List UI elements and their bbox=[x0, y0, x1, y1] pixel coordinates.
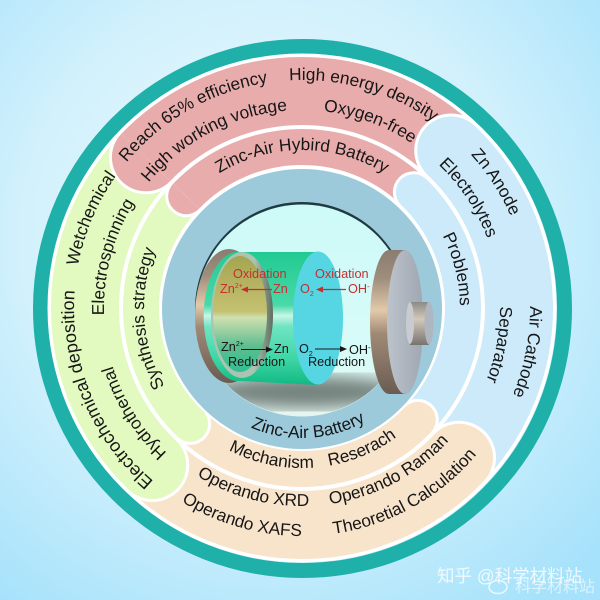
curved labels: mechanism research: Reserach bbox=[328, 430, 396, 466]
reduction labels: Zn bbox=[274, 342, 289, 356]
oxidation labels: 2+ bbox=[235, 283, 243, 290]
right metal cap side bbox=[370, 250, 406, 394]
core circle bbox=[196, 204, 408, 416]
reduction labels: Reduction bbox=[308, 355, 365, 369]
oxidation labels: O bbox=[300, 282, 310, 296]
curved labels: hybrid battery advantages bbox=[118, 68, 438, 182]
left metal casing bbox=[195, 249, 263, 383]
battery illustration bbox=[195, 249, 434, 408]
curved labels: synthesis strategy: Wetchemical bbox=[66, 170, 116, 264]
curved labels: mechanism research: Theoretial Calculation bbox=[332, 450, 476, 534]
reduction labels: Reduction bbox=[228, 355, 285, 369]
oxidation labels: - bbox=[367, 282, 370, 291]
curved labels: hybrid battery advantages: Reach 65% efficiency bbox=[118, 74, 266, 162]
reduction labels: O bbox=[299, 342, 309, 356]
reduction labels: 2 bbox=[309, 351, 313, 358]
watermark: 知乎 @科学材料站 bbox=[437, 566, 582, 586]
panel: problems inner band bbox=[74, 80, 530, 536]
panel: mechanism inner band bbox=[74, 80, 530, 536]
curved labels: hybrid battery advantages: Oxygen-free bbox=[325, 100, 415, 142]
curved labels: hybrid battery advantages: Zinc-Air Hybird Battery bbox=[214, 138, 390, 174]
curved labels: synthesis strategy: Electrochemical deposition bbox=[61, 291, 152, 490]
watermark: 科学材料站 bbox=[515, 578, 595, 596]
curved labels: synthesis strategy bbox=[61, 170, 166, 490]
cyan air cathode disc bbox=[293, 252, 343, 384]
core circle rim bbox=[195, 202, 409, 416]
reduction labels: 2+ bbox=[236, 341, 244, 348]
anode rim bbox=[211, 252, 273, 378]
curved labels: mechanism research: Zinc-Air Battery bbox=[251, 413, 362, 438]
teal outer ring bbox=[40, 46, 564, 570]
outer white ring bbox=[48, 54, 556, 562]
pink outer band, right part bbox=[85, 91, 519, 525]
oxidation labels: OH bbox=[348, 282, 367, 296]
stud end bbox=[424, 302, 434, 344]
curved labels: problems bbox=[440, 148, 542, 397]
curved labels: problems: Zn Anode bbox=[471, 148, 518, 215]
curved labels: problems: Air Cathode bbox=[514, 306, 542, 397]
curved labels: synthesis strategy: Hydrothermal bbox=[101, 366, 166, 460]
curved labels: mechanism research: Operando XAFS bbox=[184, 494, 302, 536]
stud base bbox=[406, 302, 414, 344]
curved labels: hybrid battery advantages: High working voltage bbox=[140, 102, 286, 182]
reduction labels: - bbox=[368, 343, 371, 352]
oxidation labels: Zn bbox=[273, 282, 288, 296]
curved labels: mechanism research bbox=[184, 413, 476, 536]
curved labels: mechanism research: Operando XRD bbox=[199, 468, 308, 506]
curved labels: synthesis strategy: Synthesis strategy bbox=[132, 246, 163, 390]
watermark bbox=[437, 566, 595, 596]
curved labels: mechanism research: Mechanism bbox=[230, 440, 313, 468]
pink inner band, right part bbox=[141, 147, 463, 469]
oxidation arrows bbox=[241, 286, 346, 292]
reduction arrows bbox=[241, 346, 347, 352]
oxidation labels: Oxidation bbox=[315, 267, 369, 281]
reduction labels: OH bbox=[349, 343, 368, 357]
oxidation labels: Zn bbox=[220, 282, 235, 296]
right metal cap face bbox=[387, 250, 423, 394]
curved labels: problems: Problems bbox=[443, 232, 470, 306]
green electrolyte body bbox=[204, 252, 318, 385]
oxidation labels bbox=[220, 267, 370, 298]
curved labels: problems: Electrolytes bbox=[440, 157, 495, 238]
oxidation labels: Oxidation bbox=[233, 267, 287, 281]
curved labels: synthesis strategy: Electrospinning bbox=[92, 199, 136, 314]
curved labels: problems: Separator bbox=[487, 307, 512, 384]
floor shadow bbox=[205, 376, 405, 408]
reduction labels bbox=[221, 340, 371, 369]
panel: synthesis inner band bbox=[74, 80, 530, 536]
oxidation labels: 2 bbox=[310, 291, 314, 298]
blue zinc-air ring bbox=[162, 169, 442, 449]
reduction labels: Zn bbox=[221, 340, 236, 354]
curved labels: hybrid battery advantages: High energy density bbox=[290, 68, 438, 122]
panel: hybrid battery inner band, left part bbox=[74, 80, 530, 536]
metal stud bbox=[410, 302, 429, 345]
anode window bbox=[213, 256, 267, 372]
curved labels: mechanism research: Operando Raman bbox=[330, 436, 448, 505]
